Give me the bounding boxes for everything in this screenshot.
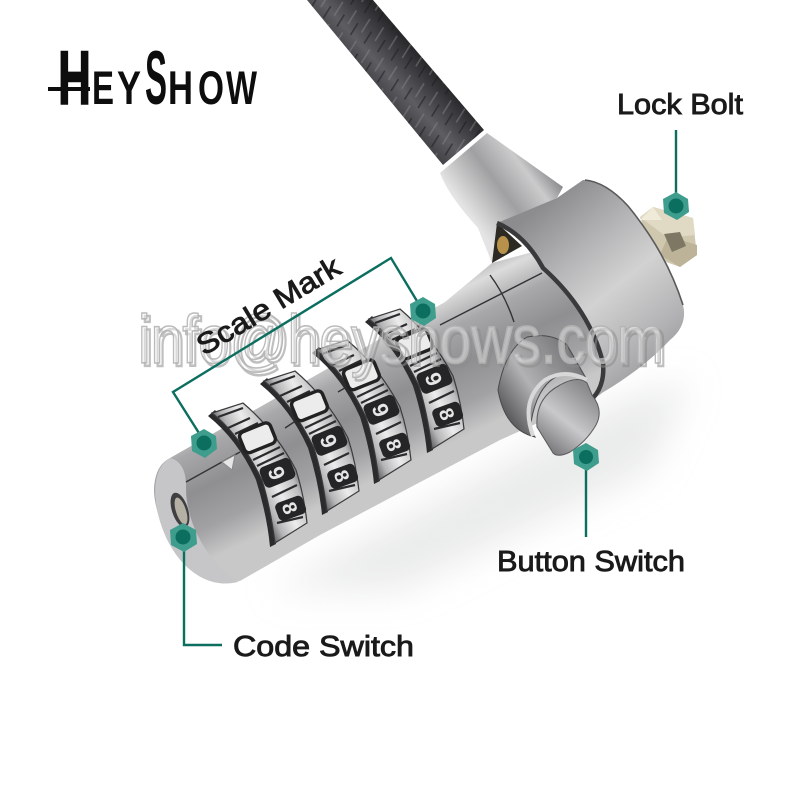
combination dial 3: 9	[367, 400, 394, 421]
logo: HeyShow: H	[168, 61, 193, 114]
watermark: info@heyshows.com	[138, 301, 664, 378]
combination dial 3	[312, 340, 412, 484]
callout: Code Switch: Code Switch	[233, 631, 414, 663]
button ring	[529, 374, 587, 436]
logo: HeyShow	[48, 36, 257, 121]
main body	[154, 250, 650, 582]
head rim	[497, 223, 603, 398]
callout: Lock Bolt	[617, 89, 743, 220]
lock illustration	[154, 0, 697, 584]
floor shadow under lock	[270, 380, 690, 590]
code switch hole	[167, 490, 193, 530]
neck	[440, 133, 563, 263]
head cylinder	[497, 180, 684, 398]
combination dial 3: 8	[381, 436, 405, 455]
logo: HeyShow: E	[92, 61, 114, 114]
callout: Code Switch	[170, 523, 414, 663]
end cap face	[155, 458, 238, 584]
logo: HeyShow: S	[145, 36, 167, 121]
button pin	[537, 379, 599, 455]
callout: Button Switch: Button Switch	[497, 546, 685, 578]
combination dial 4: 9	[420, 369, 447, 390]
callout: Lock Bolt: Lock Bolt	[617, 89, 743, 121]
logo: HeyShow: W	[226, 61, 257, 114]
combination dial 2: 8	[329, 467, 353, 486]
combination dial 2	[260, 371, 360, 515]
logo: HeyShow: Y	[117, 61, 141, 114]
callout: Button Switch	[497, 443, 685, 578]
combination dial 4	[365, 309, 465, 453]
logo: HeyShow: H	[58, 36, 91, 121]
scale arrow	[222, 455, 235, 470]
brass gap	[492, 223, 522, 263]
combination dial 1: 9	[263, 463, 290, 484]
combination dial 1	[208, 403, 308, 547]
callout: Scale Mark: Scale Mark	[191, 251, 347, 362]
combination dial 4: 8	[434, 405, 458, 424]
callout: Scale Mark	[173, 251, 436, 458]
combination dial 1: 8	[277, 499, 301, 518]
watermark: info@heyshows.com	[141, 304, 667, 381]
cable	[307, 0, 484, 165]
lock bolt teeth	[640, 207, 697, 267]
combination dial 2: 9	[315, 431, 342, 452]
body seam	[186, 273, 542, 482]
logo: HeyShow: O	[198, 61, 224, 114]
button collar	[498, 336, 587, 437]
